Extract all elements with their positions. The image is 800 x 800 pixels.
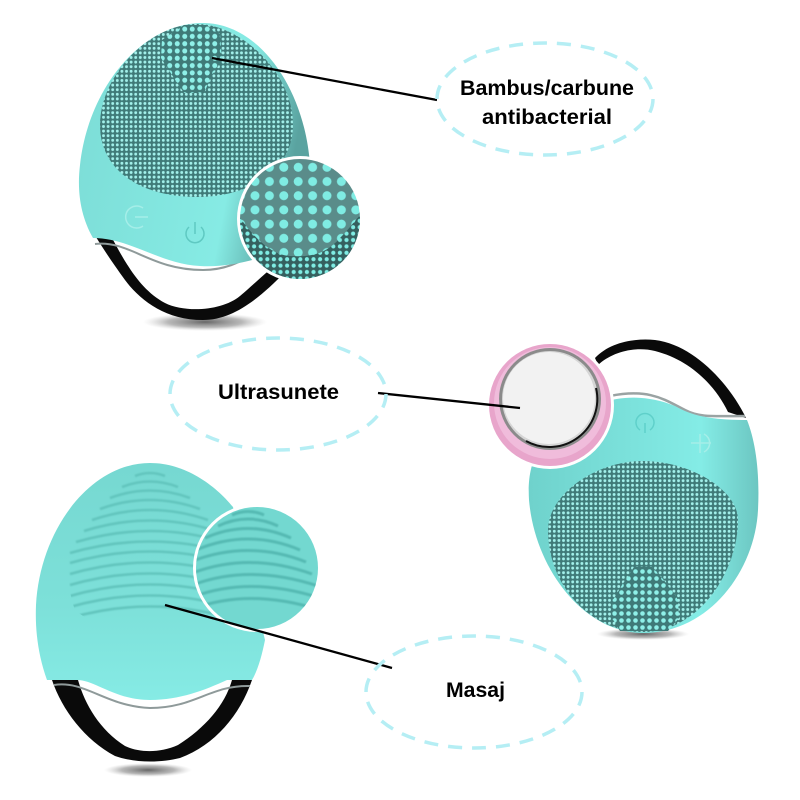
icon: plus button (691, 434, 711, 453)
device 3: massage side (36, 463, 321, 777)
device 2 strap (595, 340, 746, 418)
icon: power button (636, 414, 654, 433)
device 1 dotted pad (100, 24, 293, 197)
device 1 chrome band (95, 244, 252, 270)
device 3 shadow (104, 763, 192, 777)
callout: Ultrasunete: Ultrasunete (218, 381, 339, 404)
callout: Bambus/carbune antibacterial (437, 43, 653, 155)
callout line: bamboo (212, 58, 437, 100)
head with pink ring (486, 341, 614, 469)
callout: Bambus/carbune antibacterial: Bambus/carbune (460, 77, 634, 100)
device 2 shadow (597, 628, 689, 640)
callout: Masaj (366, 636, 582, 748)
callout: Bambus/carbune antibacterial: antibacterial (482, 106, 612, 129)
callout: Masaj: Masaj (446, 679, 505, 702)
device 2 body (529, 398, 758, 633)
device 2 coarse dot zone (612, 567, 679, 631)
magnifier: coarse dots (237, 156, 365, 285)
device 1 body (79, 23, 310, 266)
device 1 strap (96, 237, 285, 320)
icon: minus button (126, 206, 148, 228)
device 2 chrome band (610, 393, 745, 416)
device 1 coarse dot zone (161, 25, 222, 93)
device 3 chrome band (54, 684, 250, 708)
callout: Ultrasunete (170, 338, 386, 450)
callout line: massage (165, 605, 392, 668)
device 3 massage ridges (70, 473, 230, 618)
device 2: ultrasound side (486, 340, 758, 640)
device 1: brush with dotted pad (79, 23, 365, 331)
icon: power button (186, 222, 204, 243)
device 2 dotted pad (548, 461, 738, 632)
device 3 body (36, 463, 265, 700)
device 3 strap (52, 680, 252, 762)
device 1 shadow (143, 313, 267, 331)
magnifier: ridges (190, 504, 321, 632)
callout line: ultrasound (378, 393, 520, 408)
